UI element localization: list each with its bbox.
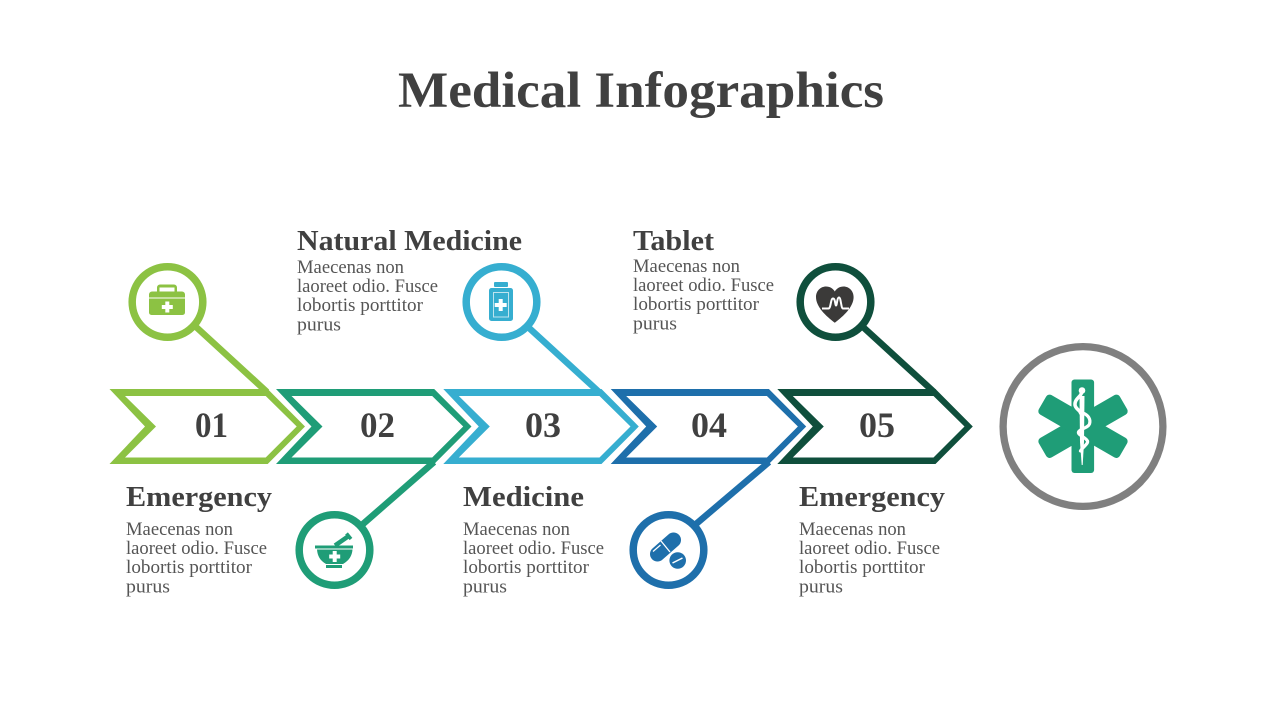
body: purus bbox=[463, 578, 507, 598]
circle 3 bbox=[466, 267, 537, 337]
step 4: dark blue chevron with connector and icon bbox=[611, 389, 806, 585]
text block: Emergency (second) bbox=[799, 482, 945, 598]
text block: Natural Medicine bbox=[297, 226, 522, 336]
body bbox=[297, 258, 438, 336]
heading: Tablet bbox=[633, 226, 715, 257]
step 3: blue chevron with connector and icon bbox=[443, 267, 639, 464]
central emblem: star of life bbox=[1003, 347, 1163, 506]
icon: mortar and pestle bbox=[315, 534, 353, 568]
body: laoreet odio. Fusce bbox=[799, 539, 940, 559]
text block: Medicine bbox=[463, 482, 604, 598]
star arms bbox=[1037, 380, 1129, 473]
step 2: teal chevron with connector and icon bbox=[276, 389, 472, 585]
body: Maecenas non bbox=[297, 258, 404, 278]
chevron 01 bbox=[110, 389, 305, 464]
body: laoreet odio. Fusce bbox=[463, 539, 604, 559]
circle 5 bbox=[800, 267, 871, 337]
body: laoreet odio. Fusce bbox=[297, 277, 438, 297]
body bbox=[463, 520, 604, 598]
text block: Emergency bbox=[126, 482, 272, 598]
chevron 04 bbox=[611, 389, 806, 464]
number 04: 04 bbox=[691, 405, 727, 445]
heading: Natural Medicine bbox=[297, 226, 522, 257]
body: lobortis porttitor bbox=[297, 296, 423, 316]
heading: Emergency bbox=[799, 482, 945, 513]
body: lobortis porttitor bbox=[633, 295, 759, 315]
connector 1 bbox=[195, 326, 267, 392]
chevron 02 bbox=[276, 389, 472, 464]
number 05: 05 bbox=[859, 405, 895, 445]
text block: Tablet bbox=[633, 226, 774, 334]
chevron 03 bbox=[443, 389, 639, 464]
body: Maecenas non bbox=[463, 520, 570, 540]
body: lobortis porttitor bbox=[126, 558, 252, 578]
body: lobortis porttitor bbox=[463, 558, 589, 578]
body: Maecenas non bbox=[126, 520, 233, 540]
body bbox=[633, 257, 774, 334]
circle 4 bbox=[633, 515, 704, 585]
body bbox=[799, 520, 940, 598]
circle 2 bbox=[299, 515, 370, 585]
body: purus bbox=[799, 578, 843, 598]
step 5: dark green chevron with connector and icon bbox=[777, 267, 973, 464]
icon: medicine bottle bbox=[489, 282, 513, 321]
icon: first aid kit bbox=[149, 284, 185, 315]
title: Medical Infographics bbox=[398, 63, 884, 119]
body: purus bbox=[126, 578, 170, 598]
icon: pills bbox=[653, 540, 686, 569]
connector 2 bbox=[363, 462, 434, 524]
heading: Medicine bbox=[463, 482, 584, 513]
number 03: 03 bbox=[525, 405, 561, 445]
body: Maecenas non bbox=[633, 257, 740, 277]
heading: Emergency bbox=[126, 482, 272, 513]
chevron 05 bbox=[777, 389, 973, 464]
body: purus bbox=[633, 314, 677, 334]
number 02: 02 bbox=[360, 405, 395, 445]
outer grey ring bbox=[1003, 347, 1163, 506]
number 01: 01 bbox=[195, 405, 228, 445]
body: Maecenas non bbox=[799, 520, 906, 540]
body: laoreet odio. Fusce bbox=[126, 539, 267, 559]
connector 3 bbox=[528, 327, 599, 392]
body: lobortis porttitor bbox=[799, 558, 925, 578]
connector 5 bbox=[863, 327, 934, 392]
body bbox=[126, 520, 267, 598]
circle 1 bbox=[132, 267, 203, 337]
body: purus bbox=[297, 316, 341, 336]
connector 4 bbox=[696, 462, 769, 524]
icon: heart with pulse bbox=[816, 286, 854, 323]
body: laoreet odio. Fusce bbox=[633, 276, 774, 296]
rod and serpent bbox=[1075, 387, 1090, 465]
step 1: green chevron with connector and icon bbox=[110, 267, 305, 464]
